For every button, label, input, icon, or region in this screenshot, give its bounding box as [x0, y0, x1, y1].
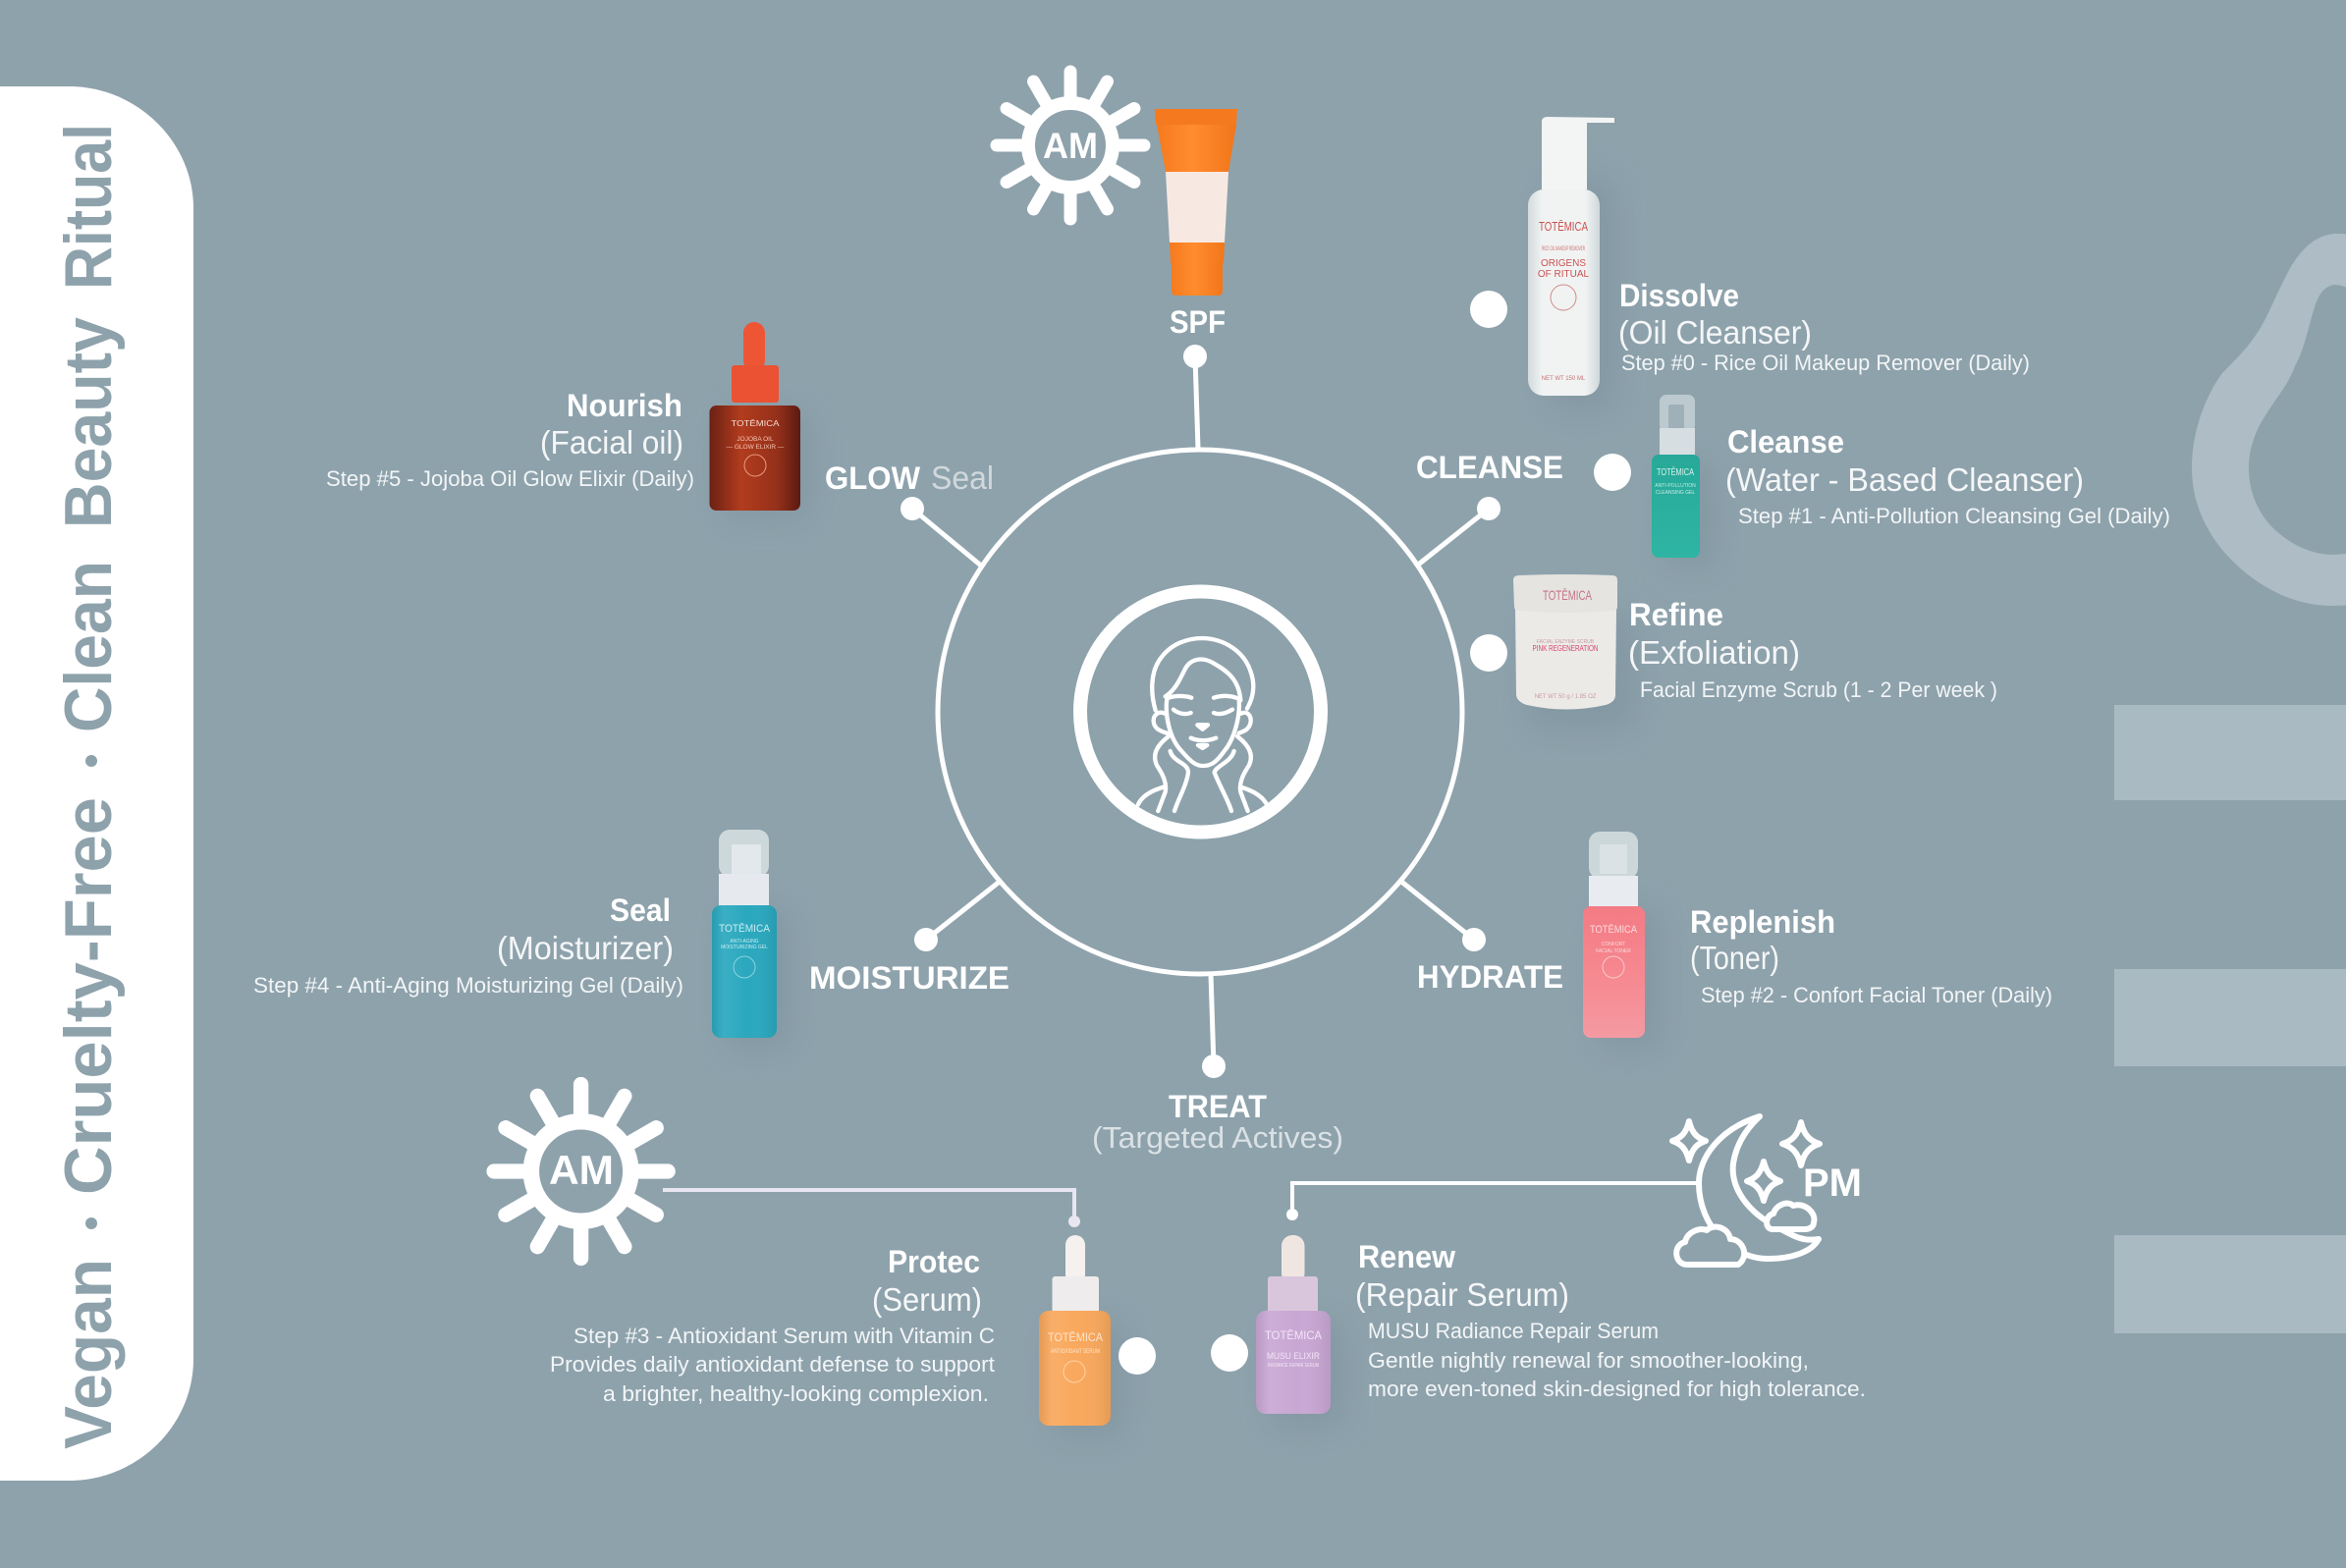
- product: pink toner bottle: CONFORT: [1602, 942, 1625, 947]
- product: teal cleansing gel bottle: CLEANSING GEL: [1656, 490, 1695, 496]
- product: oil cleanser pump bottle: TOTĒMICA: [1539, 219, 1588, 234]
- product: jojoba oil dropper: [709, 322, 800, 511]
- product: oil cleanser pump bottle: RICE OIL MAKEUP REMOVER: [1542, 246, 1585, 252]
- product: pink toner bottle: [1583, 832, 1645, 1038]
- description: step 3: Provides daily antioxidant defense to support: [550, 1352, 995, 1377]
- icon: AM sun bottom: AM: [549, 1147, 614, 1193]
- product: lilac repair serum: MUSU ELIXIR: [1267, 1351, 1320, 1361]
- description: MUSU serum: Gentle nightly renewal for smoother-looking,: [1368, 1348, 1809, 1373]
- description: step 3: Step #3 - Antioxidant Serum with Vitamin C: [573, 1324, 995, 1348]
- label: TREAT with targeted actives: [1092, 1089, 1343, 1155]
- vertical tagline text: [51, 124, 126, 1449]
- product: lilac repair serum: RADIANCE REPAIR SERUM: [1268, 1363, 1319, 1369]
- panel: Protec step: [494, 1084, 1156, 1426]
- heading: Refine: Refine: [1629, 597, 1723, 632]
- spokes and end dots: [900, 345, 1500, 1078]
- subheading: Repair Serum: (Repair Serum): [1355, 1276, 1569, 1313]
- vertical tagline text: Clean: [51, 561, 126, 732]
- product: white scrub jar: TOTĒMICA: [1543, 587, 1592, 603]
- dot marker: [1211, 1334, 1248, 1372]
- product: orange antioxidant serum: TOTĒMICA: [1048, 1330, 1103, 1344]
- subheading: Facial oil: (Facial oil): [540, 424, 683, 460]
- product: oil cleanser pump bottle: [1528, 117, 1614, 396]
- product: oil cleanser pump bottle: OF RITUAL: [1538, 269, 1590, 280]
- label: SPF: SPF: [1170, 304, 1226, 340]
- description: scrub: Facial Enzyme Scrub (1 - 2 Per week ): [1640, 677, 1997, 702]
- product: white scrub jar: [1513, 574, 1617, 709]
- icon: AM sun top: AM: [1043, 126, 1098, 166]
- subheading: Serum: (Serum): [872, 1281, 982, 1318]
- product: jojoba oil dropper: — GLOW ELIXIR —: [727, 444, 785, 451]
- description: step 1: Step #1 - Anti-Pollution Cleansing Gel (Daily): [1738, 504, 2170, 528]
- arrow: PM connector to serum: [1286, 1183, 1699, 1220]
- heading: Nourish: Nourish: [567, 388, 682, 423]
- icon: AM sun bottom: [494, 1084, 668, 1259]
- product: lilac repair serum: [1256, 1235, 1331, 1414]
- label: GLOW Seal: [825, 460, 994, 496]
- icon: PM moon with stars and clouds: [1672, 1116, 1862, 1265]
- decorative bar 3: [2114, 1235, 2346, 1333]
- label: MOISTURIZE: MOISTURIZE: [809, 960, 1009, 996]
- product: orange antioxidant serum: ANTIOXIDANT SERUM: [1051, 1349, 1100, 1355]
- product: oil cleanser pump bottle: NET WT 150 ML: [1542, 376, 1586, 382]
- heading: Seal: Seal: [610, 892, 671, 928]
- description: step 5: Step #5 - Jojoba Oil Glow Elixir (Daily): [326, 466, 694, 491]
- product: SPF tube: [1155, 109, 1237, 296]
- vertical tagline text: Vegan: [51, 1259, 126, 1449]
- subheading: Toner: (Toner): [1690, 940, 1779, 976]
- description: step 4: Step #4 - Anti-Aging Moisturizing Gel (Daily): [253, 973, 683, 998]
- description: step 3: [550, 1324, 995, 1406]
- panel: Cleanse step: [1594, 395, 2170, 558]
- product: blue moisturizer bottle: [712, 830, 777, 1038]
- label: GLOW Seal: Seal: [931, 460, 994, 496]
- product: teal cleansing gel bottle: [1652, 395, 1700, 558]
- vertical tagline text: Beauty: [51, 317, 126, 528]
- icon: woman's face in ring: [1080, 591, 1321, 833]
- product: jojoba oil dropper: TOTĒMICA: [731, 418, 780, 428]
- panel: Replenish step: [1583, 832, 2052, 1038]
- heading: Renew: Renew: [1358, 1239, 1455, 1274]
- label: CLEANSE: CLEANSE: [1416, 450, 1563, 485]
- product: lilac repair serum: TOTĒMICA: [1265, 1328, 1322, 1342]
- product: pink toner bottle: TOTĒMICA: [1590, 924, 1638, 936]
- description: MUSU serum: MUSU Radiance Repair Serum: [1368, 1319, 1659, 1343]
- description: step 0: Step #0 - Rice Oil Makeup Remover (Daily): [1621, 351, 2030, 375]
- description: step 3: a brighter, healthy-looking complexion.: [603, 1381, 989, 1406]
- decorative pear outline: [2192, 234, 2346, 606]
- outer wheel circle: [938, 450, 1462, 974]
- heading: Replenish: Replenish: [1690, 904, 1835, 940]
- subheading: Exfoliation: (Exfoliation): [1628, 634, 1800, 671]
- subheading: Water-Based Cleanser: (Water - Based Cleanser): [1725, 461, 2084, 498]
- product: blue moisturizer bottle: TOTĒMICA: [719, 923, 771, 935]
- product: blue moisturizer bottle: MOISTURIZING GEL: [721, 945, 768, 950]
- icon: AM sun top: [997, 72, 1144, 219]
- subheading: Moisturizer: (Moisturizer): [497, 930, 674, 966]
- dot marker: [1118, 1337, 1156, 1375]
- heading: Cleanse: Cleanse: [1727, 424, 1844, 460]
- product: teal cleansing gel bottle: ANTI-POLLUTION: [1655, 483, 1696, 489]
- panel: Renew step: [1211, 1116, 1866, 1414]
- label: HYDRATE: HYDRATE: [1417, 959, 1563, 995]
- arrow: AM connector to serum: [663, 1190, 1080, 1227]
- product: orange antioxidant serum: [1039, 1235, 1111, 1426]
- icon: PM moon with stars and clouds: PM: [1803, 1162, 1862, 1205]
- product: teal cleansing gel bottle: TOTĒMICA: [1657, 466, 1694, 478]
- panel: Refine step: [1470, 574, 1997, 709]
- panel: sidebar tagline: [0, 86, 193, 1481]
- decorative bar 1: [2114, 705, 2346, 800]
- heading: Protec: Protec: [888, 1244, 980, 1279]
- product: jojoba oil dropper: JOJOBA OIL: [737, 436, 774, 443]
- panel: Nourish step: [326, 322, 800, 511]
- vertical tagline text: Ritual: [51, 124, 126, 290]
- description: step 2: Step #2 - Confort Facial Toner (Daily): [1701, 983, 2052, 1007]
- dot marker: [1470, 291, 1507, 328]
- panel: Dissolve step: [1470, 117, 2030, 396]
- decorative bar 2: [2114, 969, 2346, 1066]
- product: white scrub jar: PINK REGENERATION: [1532, 644, 1599, 653]
- label: GLOW Seal: GLOW: [825, 460, 921, 496]
- product: oil cleanser pump bottle: ORIGENS: [1541, 258, 1586, 269]
- vertical tagline text: Cruelty-Free: [51, 797, 126, 1195]
- label: TREAT with targeted actives: (Targeted Actives): [1092, 1120, 1343, 1155]
- product: white scrub jar: FACIAL ENZYME SCRUB: [1537, 639, 1595, 645]
- description: MUSU serum: more even-toned skin-designed for high tolerance.: [1368, 1377, 1866, 1401]
- label: TREAT with targeted actives: TREAT: [1169, 1089, 1267, 1124]
- panel: Seal step: [253, 830, 777, 1038]
- product: blue moisturizer bottle: ANTI-AGING: [730, 939, 759, 945]
- dot marker: [1470, 634, 1507, 672]
- dot marker: [1594, 454, 1631, 491]
- diagram: central ritual wheel: [900, 345, 1500, 1078]
- subheading: Oil Cleanser: (Oil Cleanser): [1618, 314, 1812, 351]
- product: white scrub jar: NET WT 50 g / 1.85 OZ: [1535, 694, 1597, 700]
- product: pink toner bottle: FACIAL TONER: [1596, 948, 1631, 954]
- description: MUSU serum: [1368, 1319, 1866, 1401]
- heading: Dissolve: Dissolve: [1619, 278, 1739, 313]
